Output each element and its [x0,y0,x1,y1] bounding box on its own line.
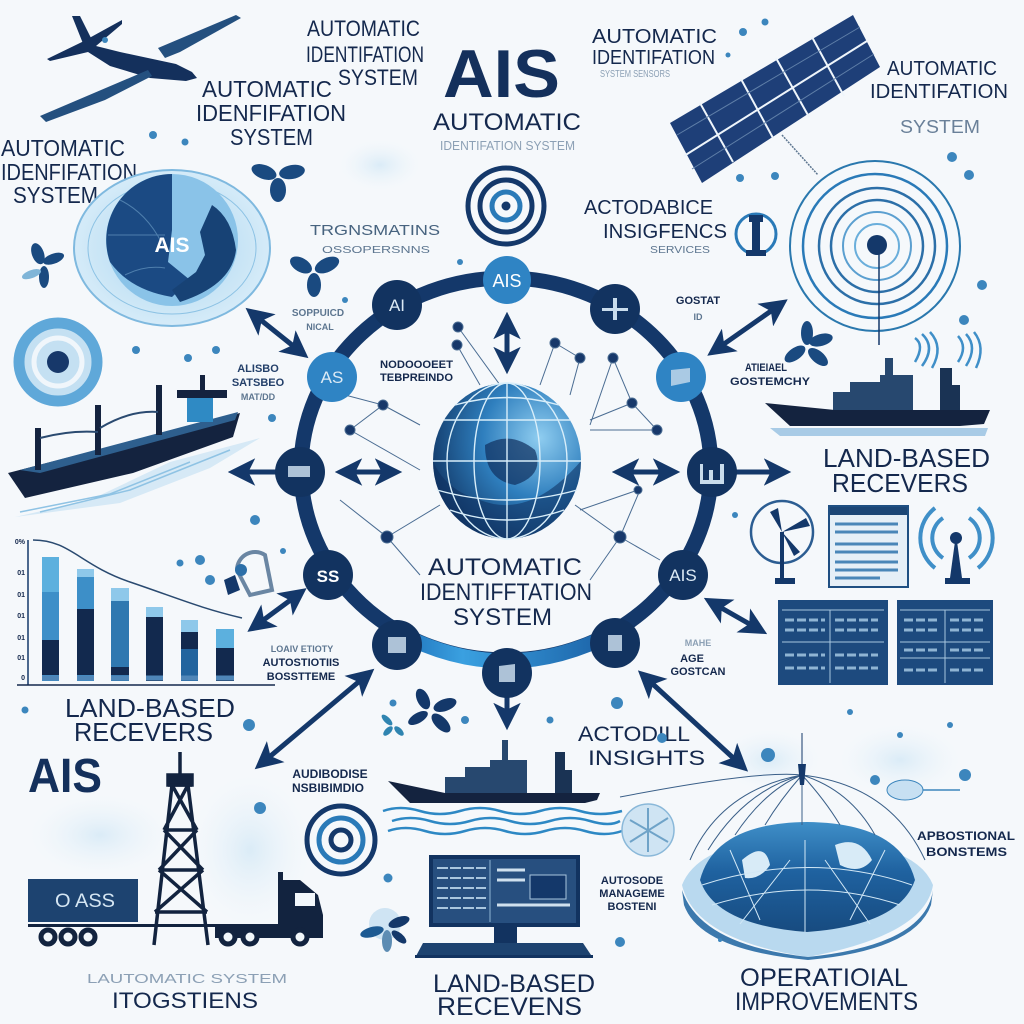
network lines [340,322,662,580]
icon: dome globe [620,733,933,960]
small label: transmissions: TRGNSMATINS [310,222,440,239]
small label: left of right ship: GOSTEMCHY [730,376,811,388]
centre heading: AUTOMATIC [428,554,582,581]
node: top AIS: AIS [492,271,522,291]
heading: automatic identification system far right [870,58,1008,137]
icon: document panel [829,506,908,587]
node labels: SS [317,567,339,586]
small label: operational systems [917,829,1015,859]
heading: automatic identification system top: IDENTIFATION [306,42,424,67]
small labels: scattered: BOSSTTEME [267,671,335,683]
centre heading: IDENTIFFTATION [420,579,592,606]
heading: land-based receivers bottom: LAND-BASED [433,970,595,998]
icon: computer monitor [415,855,593,958]
small label: automation beside monitor: AUTOSODE [601,875,663,887]
bar chart: 01 [17,592,25,599]
heading: automatic identification system left: IDENFIFATION [1,159,137,185]
heading: automatic identification system far right: IDENTIFATION [870,81,1008,103]
bar chart [15,539,275,685]
bar chart: 01 [17,655,25,662]
icon: fan radar [751,501,813,584]
icon: antenna signal [920,508,993,584]
heading: automatic identification right of title: IDENTIFATION [592,47,715,69]
small labels: scattered: ID [694,312,703,322]
node labels: AS [321,368,343,387]
small labels: scattered: AUTOSTIOTIIS [263,657,339,669]
small label: left of right ship: ATIEIAEL [745,362,787,374]
icon: target rings left [19,323,97,401]
heading: automatic identification right of title: SYSTEM SENSORS [600,69,670,80]
heading: operational improvements [735,964,918,1016]
icon: small dish lower left [224,552,272,595]
small label: inside ring: NODOOOEET [380,359,453,371]
heading: actionable insights top: INSIGFENCS [603,221,727,243]
arrows around ring [236,304,783,766]
small labels: scattered: NICAL [306,322,334,332]
heading: bottom-left: ITOGSTIENS [112,988,258,1013]
small label: under insights: SERVICES [650,245,710,256]
small label: automation beside monitor: BOSTENI [608,901,656,913]
heading: land-based receivers left: LAND-BASED [65,693,235,723]
node labels [317,296,697,586]
heading: automatic identification system second: AUTOMATIC [202,76,332,102]
icon: dish right of dome [887,780,960,800]
nodes on ring [275,280,737,698]
bar chart: 01 [17,613,25,620]
heading: land-based receivers left [65,693,235,747]
small labels: scattered: AGE [680,653,704,665]
node labels: AI [389,296,405,315]
subtitle: automatic: AUTOMATIC [433,109,581,136]
icon: airplane [40,15,241,122]
heading: AIS bottom-left: AIS [28,750,102,803]
heading: automatic identification right of title [592,26,717,80]
bar chart: 0 [21,675,25,682]
icon: truck [28,872,323,944]
data tables [778,600,993,685]
small labels: scattered: SATSBEO [232,377,285,389]
small label: under transmissions: OSSOPERSNNS [322,245,430,256]
centre heading [420,554,592,631]
heading: operational improvements: OPERATIOIAL [740,964,908,992]
bar chart: 01 [17,570,25,577]
small labels: scattered: LOAIV ETIOTY [271,644,333,654]
small label: automation beside monitor [599,875,665,913]
small labels: scattered: SOPPUICD [292,308,344,319]
heading: land-based receivers right [823,443,990,498]
heading: automatic identification system left [1,135,137,208]
small labels: scattered: MAT/DD [241,392,276,402]
icon: signal arcs [915,332,981,368]
small text: identification system blurred: IDENTIFATION SYSTEM [440,138,575,153]
heading: bottom-left: LAUTOMATIC SYSTEM [87,971,287,986]
heading: land-based receivers right: LAND-BASED [823,443,990,473]
heading: land-based receivers bottom [433,970,595,1021]
heading: automatic identification system second: SYSTEM [230,124,313,150]
icon: cargo ship left [8,375,260,517]
ring diagram [275,256,737,698]
heading: automatic identification system far right: SYSTEM [900,117,980,137]
small label: automation beside monitor: MANAGEME [599,888,665,900]
icon: radar rings right [782,135,960,345]
icon: ship right [765,358,990,436]
small labels: scattered: NSBIBIMDIO [292,781,364,795]
heading: land-based receivers bottom: RECEVENS [437,993,582,1021]
small labels: scattered [232,295,726,795]
heading: automatic identification system top [306,16,424,90]
heading: bottom-left [87,971,287,1013]
icon: satellite dish at dome left [622,804,674,856]
icon: target rings bottom [307,806,375,874]
centre heading: SYSTEM [453,604,552,631]
heading: automatic identification system left: AUTOMATIC [1,135,125,161]
heading: land-based receivers left: RECEVERS [74,717,213,747]
heading: automatic identification system second [196,76,346,150]
heading: land-based receivers right: RECEVERS [832,468,968,498]
icon: ship bottom centre [383,740,622,834]
small labels: scattered: MAHE [685,638,711,648]
heading: actionable insights bottom [578,723,705,770]
icon: target rings top centre [468,168,544,244]
icon: truck: O ASS [55,891,115,912]
heading: automatic identification system far right: AUTOMATIC [887,58,997,80]
heading: actionable insights bottom: ACTODILL [578,723,690,746]
small labels: scattered: GOSTCAN [670,666,726,678]
heading: automatic identification system second: IDENFIFATION [196,100,346,126]
small labels: scattered: GOSTAT [676,295,720,307]
node pictograms [288,298,724,682]
title: AIS: AIS [443,36,560,112]
heading: operational improvements: IMPROVEMENTS [735,988,918,1016]
bar chart: 01 [17,635,25,642]
heading: automatic identification system top: SYSTEM [338,65,418,90]
small label: inside ring [380,359,453,384]
heading: automatic identification system left: SYSTEM [13,182,98,208]
heading: automatic identification right of title: AUTOMATIC [592,26,717,48]
node: top AIS [483,256,531,304]
icon: AIS globe left [74,170,270,326]
small labels: scattered: ALISBO [237,363,279,375]
heading: automatic identification system top: AUTOMATIC [307,16,420,41]
small label: operational systems: APBOSTIONAL [917,829,1015,843]
icon: emblem beside insights [736,214,776,256]
faint blue blots [30,140,960,925]
heading: actionable insights bottom: INSIGHTS [588,747,705,770]
bar chart: 0% [15,539,26,546]
heading: actionable insights top [584,197,727,243]
small labels: scattered: AUDIBODISE [292,767,368,781]
node labels: AIS [669,566,697,585]
icon: solar panel [670,15,880,183]
central globe [433,383,581,539]
small label: left of right ship [730,362,811,388]
icon: fan propellers [21,161,834,952]
heading: actionable insights top: ACTODABICE [584,197,713,219]
icon: transmission tower [154,752,208,945]
small label: inside ring: TEBPREINDO [380,372,453,384]
icon: AIS globe left: AIS [154,234,190,257]
small label: operational systems: BONSTEMS [926,845,1007,859]
